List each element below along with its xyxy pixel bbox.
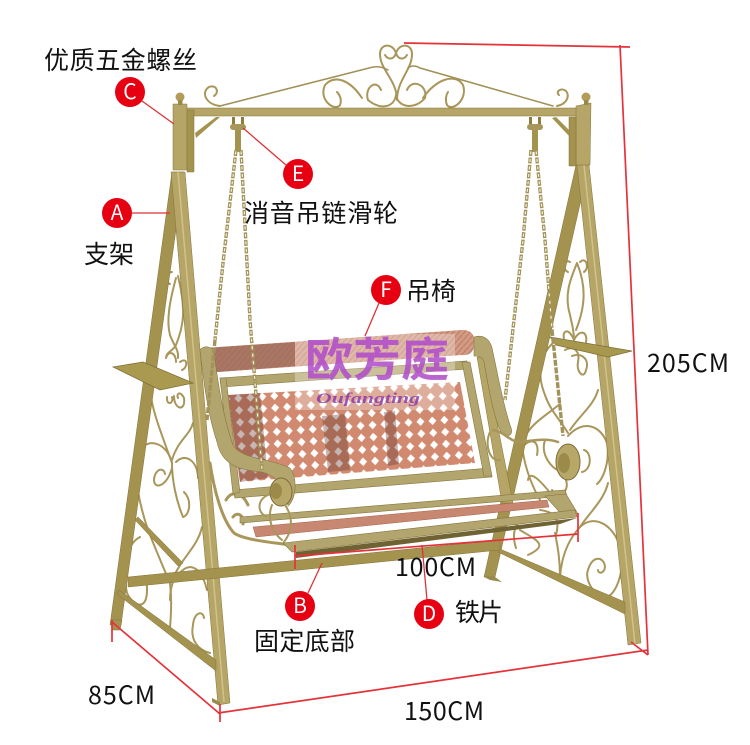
side shelves [113, 337, 632, 390]
label F: hanging chair: F [380, 274, 392, 304]
text: fixed base: 固定底部 [254, 622, 355, 658]
seat width dimension 100CM [295, 513, 578, 569]
left frame scrolls [125, 272, 210, 653]
text: hanging chair: 吊椅 [406, 272, 456, 308]
backrest frame [220, 361, 492, 498]
backrest mesh [228, 382, 475, 482]
label B: fixed base: B [293, 590, 307, 620]
arm ornaments [488, 430, 590, 495]
base bar [128, 540, 500, 587]
label C: hardware screws [115, 76, 174, 124]
right frame scrolls [514, 260, 622, 597]
label B: fixed base [285, 563, 322, 621]
watermark script: Oufangting [316, 391, 421, 407]
right A-frame legs [484, 165, 641, 645]
height dimension 205CM [404, 43, 648, 655]
headrest roll [203, 330, 474, 372]
top beam [186, 108, 588, 116]
text: silent chain pulley: 消音吊链滑轮 [244, 194, 398, 230]
back chains [215, 150, 552, 340]
front right scroll [556, 444, 580, 480]
label C: hardware screws: C [123, 76, 137, 106]
top ornament scrollwork [205, 46, 568, 107]
watermark logo text: 欧芳庭 [305, 324, 449, 390]
swing seat [200, 150, 590, 558]
text: iron sheet: 铁片 [455, 593, 503, 629]
label E: silent pulley: E [292, 158, 304, 188]
label A: support: A [111, 197, 124, 227]
width dimension 150CM [218, 650, 648, 713]
text: 100CM: 100CM [395, 548, 476, 584]
right post with bracket [552, 92, 591, 166]
left A-frame legs [110, 172, 230, 705]
text: 150CM: 150CM [404, 692, 484, 728]
text: 85CM: 85CM [88, 676, 155, 712]
label D: iron sheet: D [422, 598, 436, 628]
label D: iron sheet [414, 545, 444, 629]
left post with bracket [173, 92, 220, 172]
front chains [207, 150, 563, 470]
text: hardware screws: 优质五金螺丝 [44, 41, 197, 77]
left arm [200, 347, 295, 506]
swing frame [110, 46, 641, 706]
label F: hanging chair [365, 274, 401, 336]
left seat curve [210, 463, 290, 545]
dimension lines [112, 43, 648, 722]
label E: silent pulley [243, 128, 313, 189]
label A: support [102, 197, 170, 228]
watermark [295, 324, 455, 410]
hangers [230, 117, 543, 152]
text: support: 支架 [84, 235, 134, 271]
right arm support [477, 357, 513, 503]
depth dimension 85CM [112, 620, 648, 722]
front left scroll [260, 478, 292, 542]
text: 205CM: 205CM [647, 344, 729, 380]
left foot [212, 698, 220, 706]
dark weave patches [228, 393, 399, 482]
seat slats [240, 490, 578, 558]
right arm [474, 336, 512, 436]
